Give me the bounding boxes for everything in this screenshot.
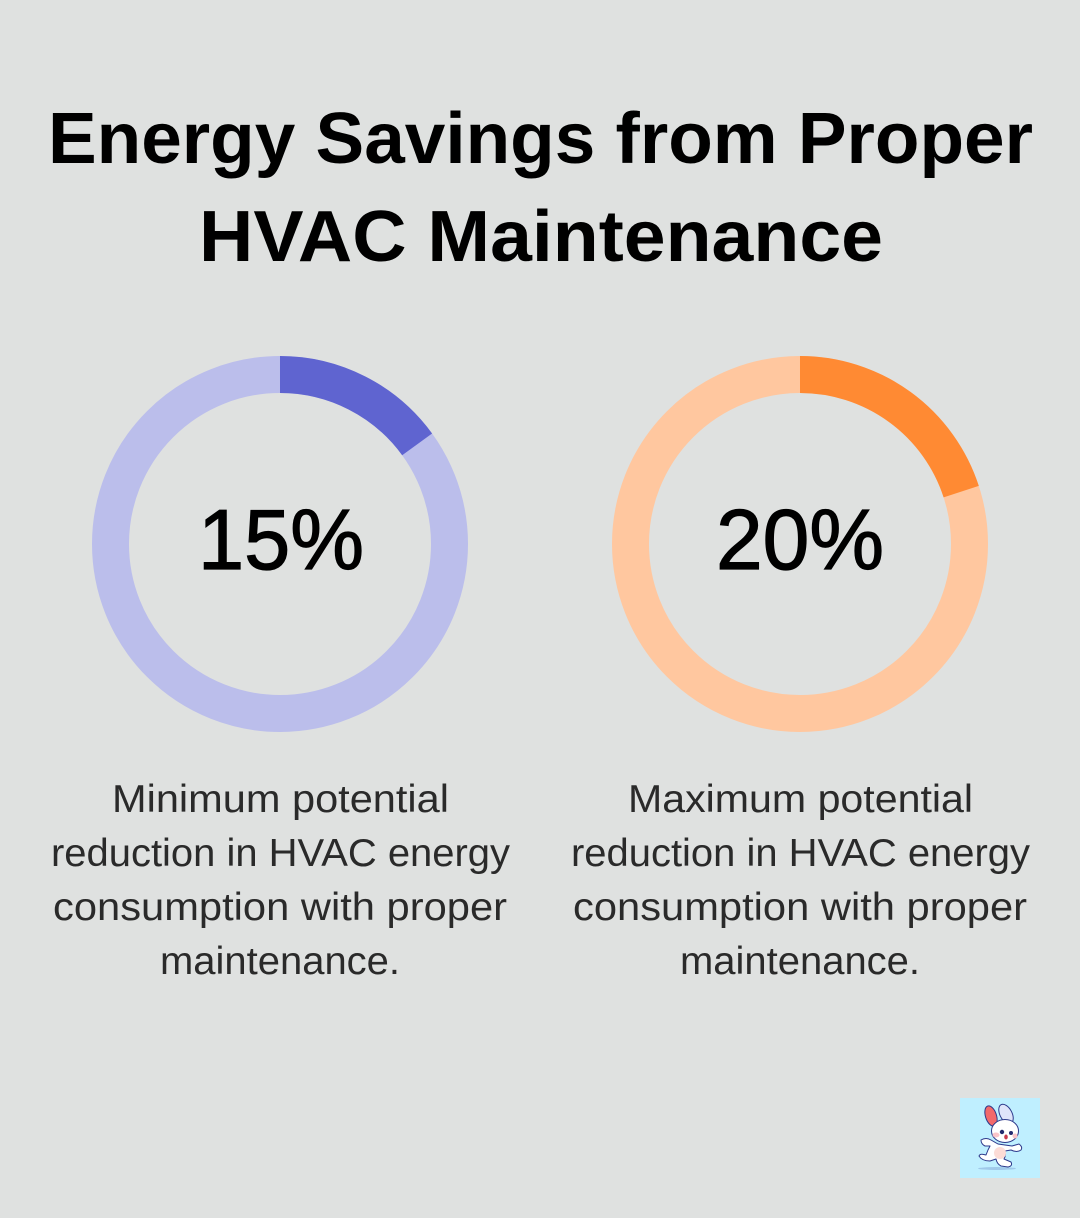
- title: Energy Savings from Proper: [48, 99, 1033, 179]
- description: minimum reduction: reduction in HVAC energy: [51, 832, 511, 875]
- value: 20%: 20%: [716, 493, 884, 588]
- value: 15%: 15%: [198, 493, 364, 588]
- description: minimum reduction: [51, 778, 511, 983]
- description: minimum reduction: maintenance.: [160, 940, 400, 983]
- description: maximum reduction: reduction in HVAC energy: [571, 832, 1031, 875]
- description: maximum reduction: consumption with proper: [573, 886, 1027, 929]
- description: maximum reduction: maintenance.: [680, 940, 920, 983]
- panel: minimum savings: [51, 374, 511, 983]
- donut chart: 20%: [630, 374, 970, 714]
- title: HVAC Maintenance: [199, 197, 883, 277]
- panel: maximum savings: [571, 374, 1031, 983]
- title: [48, 99, 1033, 277]
- description: maximum reduction: Maximum potential: [628, 778, 973, 821]
- description: minimum reduction: consumption with proper: [53, 886, 507, 929]
- description: maximum reduction: [571, 778, 1031, 983]
- icon: running rabbit logo: [960, 1098, 1040, 1178]
- donut chart: 15%: [110, 374, 450, 714]
- description: minimum reduction: Minimum potential: [112, 778, 449, 821]
